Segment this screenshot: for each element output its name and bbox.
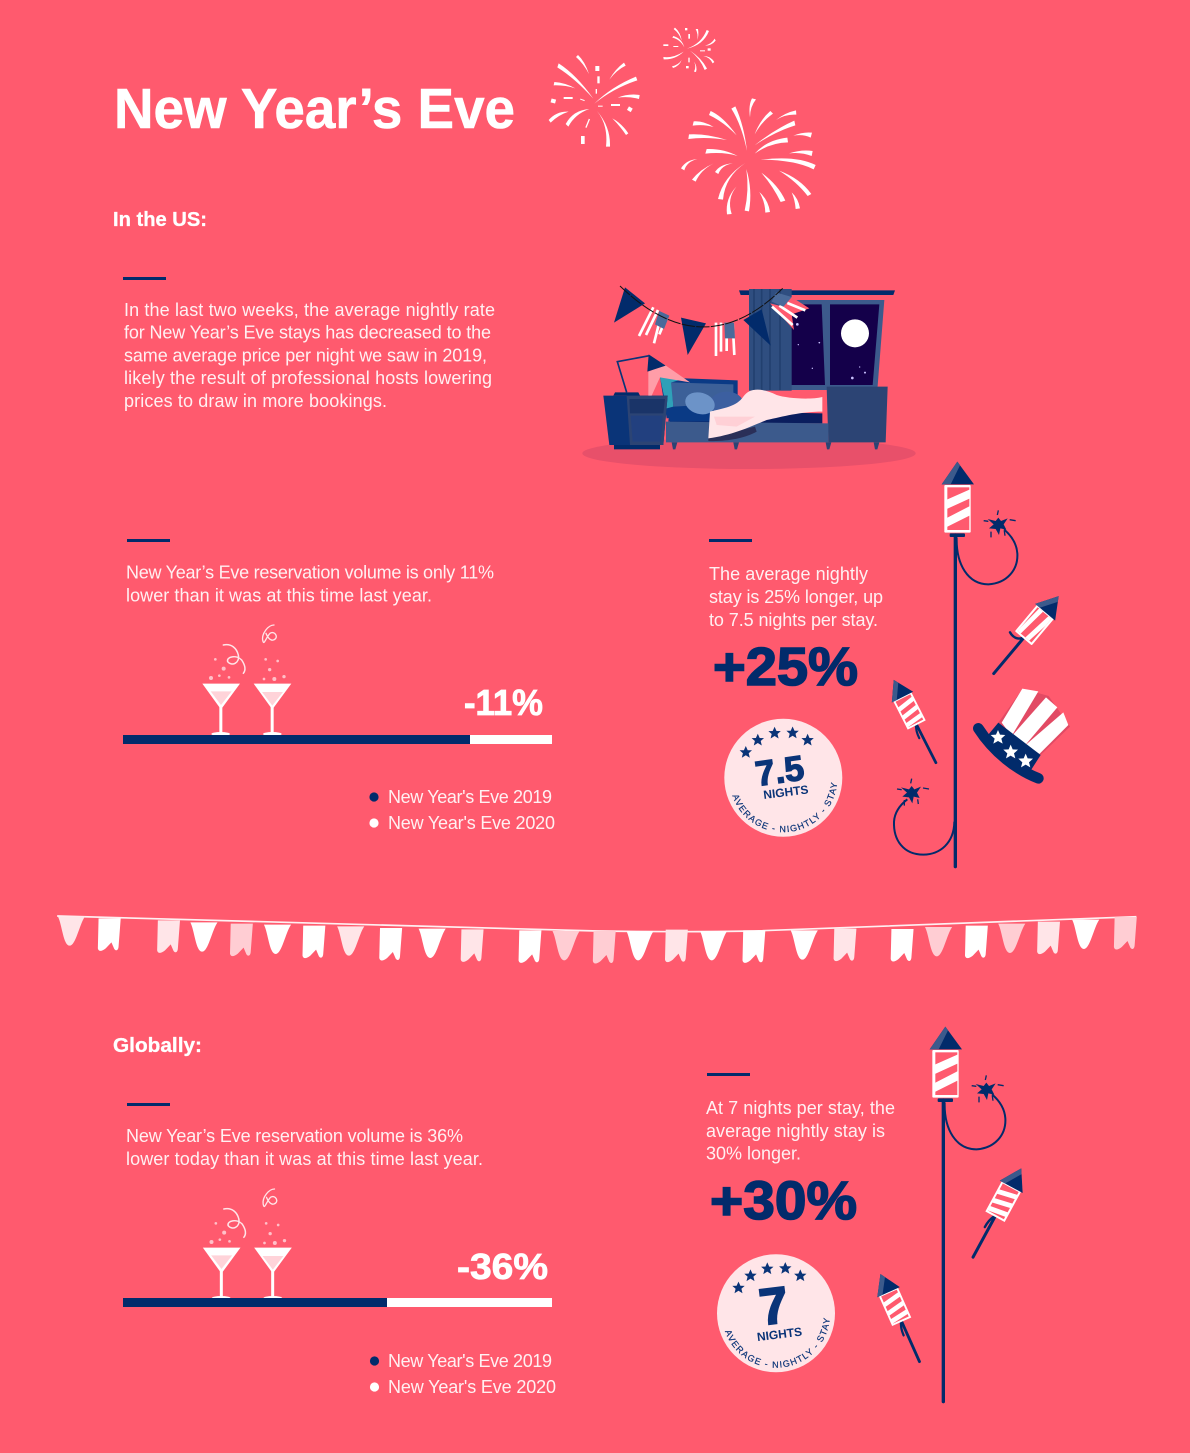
text block: global stay length (706, 1098, 895, 1164)
text block: US reservation volume: lower than it was at this time last year. (126, 586, 432, 606)
icon: small rocket right (962, 1162, 1033, 1263)
badge: 7.5 nights (724, 718, 842, 837)
text block: global stay length: At 7 nights per stay, the (706, 1098, 895, 1118)
legend: New Year's Eve 2019 (388, 787, 552, 807)
text block: US reservation volume: New Year’s Eve reservation volume is only 11% (126, 563, 494, 583)
bar chart: global volume (123, 1298, 552, 1307)
badge: 7.5 nights: NIGHTS (763, 783, 809, 802)
text block: US stay length: The average nightly (709, 564, 868, 584)
text block: nightly rate: likely the result of professional hosts lowering (124, 368, 492, 388)
heading: in the US: In the US: (113, 209, 207, 231)
icon: small rocket left (883, 674, 947, 768)
icon: champagne glasses (202, 625, 291, 736)
badge: 7 nights: NIGHTS (756, 1325, 803, 1344)
text block: US stay length: stay is 25% longer, up (709, 587, 883, 607)
legend (370, 1351, 556, 1397)
icon: fireworks (549, 28, 816, 214)
icon: uncle sam hat (978, 689, 1070, 778)
badge: 7.5 nights: 7.5 (753, 749, 807, 794)
bunting garland (57, 916, 1137, 963)
text block: nightly rate: same average price per night we saw in 2019, (124, 345, 487, 365)
text block: global reservation volume: New Year’s Eve reservation volume is 36% (126, 1126, 463, 1146)
icon: lower fuse (894, 779, 954, 855)
text block: US stay length (709, 564, 883, 630)
badge: 7.5 nights: AVERAGE - NIGHTLY - STAY (732, 782, 837, 832)
title: New Year’s Eve (114, 77, 515, 141)
text block: global reservation volume (126, 1126, 483, 1169)
text block: nightly rate: for New Year’s Eve stays has decreased to the (124, 323, 491, 343)
divider dash (709, 539, 752, 542)
text block: nightly rate (124, 300, 495, 411)
divider dash (123, 277, 166, 280)
metric: -11%: -11% (464, 682, 543, 723)
text block: US stay length: to 7.5 nights per stay. (709, 610, 878, 630)
heading: globally: Globally: (113, 1035, 202, 1057)
text block: nightly rate: prices to draw in more bookings. (124, 391, 387, 411)
text block: global stay length: 30% longer. (706, 1144, 801, 1164)
badge: 7 nights: AVERAGE - NIGHTLY - STAY (724, 1318, 830, 1368)
illustration: bedroom with flags (582, 286, 916, 469)
text block: nightly rate: In the last two weeks, the average nightly rate (124, 300, 495, 320)
metric: +30%: +30% (710, 1171, 857, 1231)
bar chart: US volume (123, 735, 552, 744)
icon: champagne glasses (203, 1189, 292, 1300)
legend: New Year's Eve 2019 (388, 1351, 552, 1371)
legend: New Year's Eve 2020 (388, 813, 555, 833)
legend (369, 787, 555, 833)
divider dash (127, 539, 170, 542)
text block: US reservation volume (126, 563, 494, 606)
divider dash (707, 1073, 750, 1076)
icon: small rocket right (983, 587, 1069, 682)
metric: +25%: +25% (713, 637, 858, 697)
legend: New Year's Eve 2020 (388, 1377, 556, 1397)
icon: rocket with fuse (942, 462, 1017, 867)
badge: 7 nights: 7 (756, 1276, 791, 1336)
divider dash (127, 1103, 170, 1106)
icon: small rocket left (869, 1269, 931, 1367)
badge: 7 nights (717, 1254, 835, 1372)
text block: global reservation volume: lower today than it was at this time last year. (126, 1149, 483, 1169)
metric: -36%: -36% (457, 1246, 548, 1287)
text block: global stay length: average nightly stay is (706, 1121, 885, 1141)
icon: rocket with fuse (930, 1027, 1005, 1402)
